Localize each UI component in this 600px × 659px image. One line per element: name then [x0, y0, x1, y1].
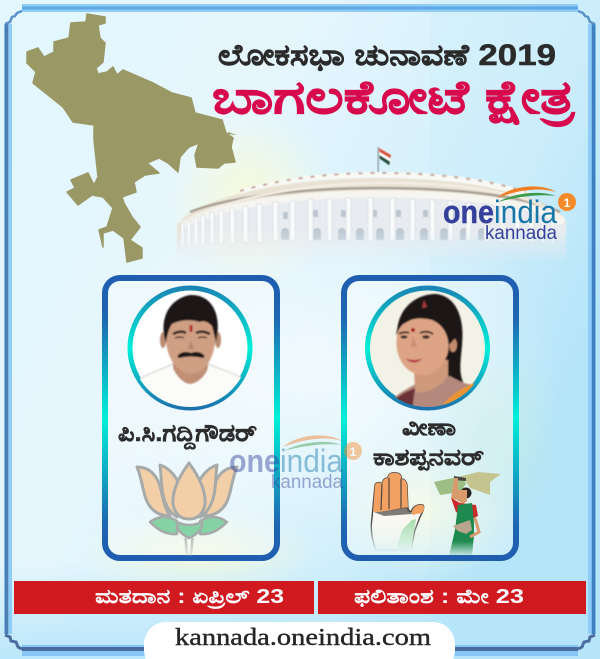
candidate name line 2: ಕಾಶಪ್ಪನವರ್	[373, 444, 484, 471]
logo: oneindia kannada	[443, 186, 576, 244]
logo: oneindia kannada: 1	[564, 196, 571, 210]
candidate name: ಪಿ.ಸಿ.ಗದ್ದಿಗೌಡರ್	[118, 420, 257, 450]
candidate card: Congress-JDS	[344, 278, 516, 558]
watermark logo: 1	[350, 445, 357, 459]
parliament building illustration	[177, 147, 566, 264]
icon: JDS woman farmer	[434, 472, 501, 556]
colonnade	[181, 198, 554, 247]
icon: BJP lotus	[137, 463, 237, 555]
arched windows	[281, 210, 486, 240]
watermark logo: kannada	[271, 472, 343, 493]
website pill: kannada.oneindia.com	[175, 625, 431, 651]
logo: oneindia kannada: india	[494, 194, 557, 230]
map of Bagalkot constituency	[27, 14, 237, 262]
date bar: polling	[14, 581, 314, 614]
logo: oneindia kannada: one	[443, 194, 494, 230]
candidate name line 1: ವೀಣಾ	[402, 414, 456, 440]
watermark logo: one	[229, 443, 280, 479]
watermark logo	[229, 435, 362, 493]
website pill	[144, 622, 455, 659]
watermark logo: india	[280, 443, 343, 479]
portrait: P.C. Gaddigoudar	[130, 288, 250, 412]
heading: election 2019: ಲೋಕಸಭಾ ಚುನಾವಣೆ 2019	[218, 39, 556, 72]
heading: constituency name: ಬಾಗಲಕೋಟೆ ಕ್ಷೇತ್ರ	[212, 71, 575, 127]
date bar: polling: ಮತದಾನ : ಏಪ್ರಿಲ್ 23	[95, 586, 284, 610]
portrait: Veena Kashappanavar	[368, 288, 488, 412]
date bar: result	[318, 581, 586, 614]
icon: Congress hand	[371, 473, 424, 550]
date bar: result: ಫಲಿತಾಂಶ : ಮೇ 23	[354, 586, 524, 608]
candidate card: BJP	[105, 278, 277, 558]
logo: oneindia kannada: kannada	[485, 223, 557, 244]
